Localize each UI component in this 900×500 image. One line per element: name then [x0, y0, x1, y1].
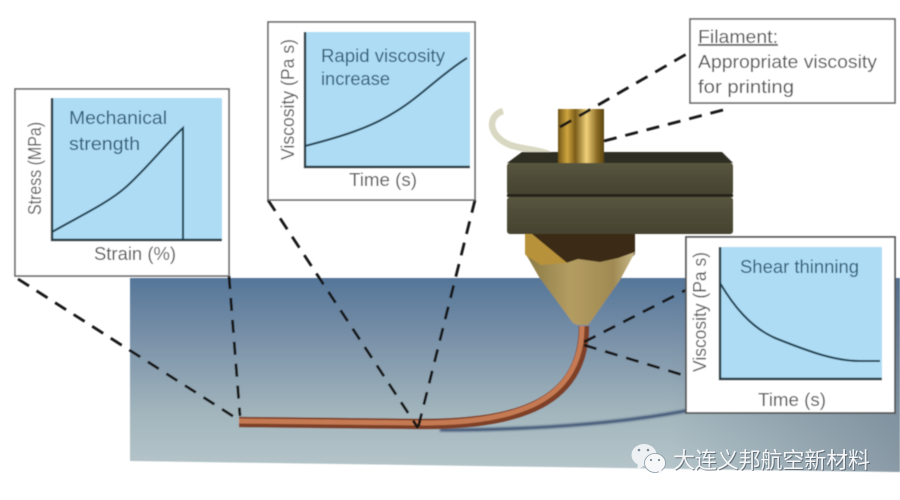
watermark shadow text: 大连义邦航空新材料	[674, 449, 871, 474]
axes	[52, 98, 222, 240]
nozzle brass highlight	[525, 234, 570, 274]
y axis label: Viscosity (Pa s)	[278, 39, 298, 160]
panel: mechanical strength	[15, 89, 229, 276]
print bed surface	[130, 278, 900, 472]
extruded filament bead	[239, 326, 584, 424]
plot area	[720, 247, 882, 379]
printer head	[492, 109, 733, 325]
stress-strain curve	[52, 128, 183, 240]
shear thinning curve	[720, 283, 880, 361]
dashed callout lines	[18, 52, 723, 428]
panel frame	[15, 89, 229, 276]
chart title line two: strength	[69, 134, 140, 154]
chart title: Rapid viscosity	[321, 46, 445, 66]
note frame	[690, 19, 895, 103]
x axis label: Strain (%)	[94, 244, 176, 264]
y axis label: Stress (MPa)	[25, 122, 45, 215]
note heading: Filament:	[698, 27, 778, 47]
axes	[720, 247, 882, 379]
plot area	[52, 98, 222, 240]
panel frame	[268, 22, 475, 200]
chart title: Mechanical	[69, 108, 167, 128]
panel frame	[686, 237, 895, 413]
chart title: Shear thinning	[740, 257, 859, 277]
axes	[305, 32, 470, 167]
note line two: for printing	[698, 77, 794, 97]
y axis label: Viscosity (Pa s)	[690, 252, 710, 372]
viscosity curve	[305, 58, 467, 146]
x axis label: Time (s)	[758, 390, 826, 410]
watermark	[632, 444, 871, 474]
filament spool strand	[492, 111, 556, 160]
note line one: Appropriate viscosity	[698, 52, 877, 72]
chart title line two: increase	[321, 69, 390, 89]
brass inlet tube	[558, 109, 604, 163]
plate groove	[507, 194, 733, 197]
panel: filament note	[690, 19, 895, 103]
head top face	[507, 152, 733, 163]
head upper plate	[507, 163, 733, 195]
nozzle cone	[527, 252, 635, 325]
shadow of extruded filament	[440, 408, 700, 430]
nozzle collar	[525, 234, 635, 268]
x axis label: Time (s)	[349, 170, 417, 190]
watermark text: 大连义邦航空新材料	[673, 448, 870, 473]
panel: shear thinning	[686, 237, 895, 413]
icon: wechat	[632, 444, 666, 474]
panel: rapid viscosity increase	[268, 22, 475, 200]
head lower plate	[507, 197, 733, 234]
plot area	[305, 32, 470, 167]
